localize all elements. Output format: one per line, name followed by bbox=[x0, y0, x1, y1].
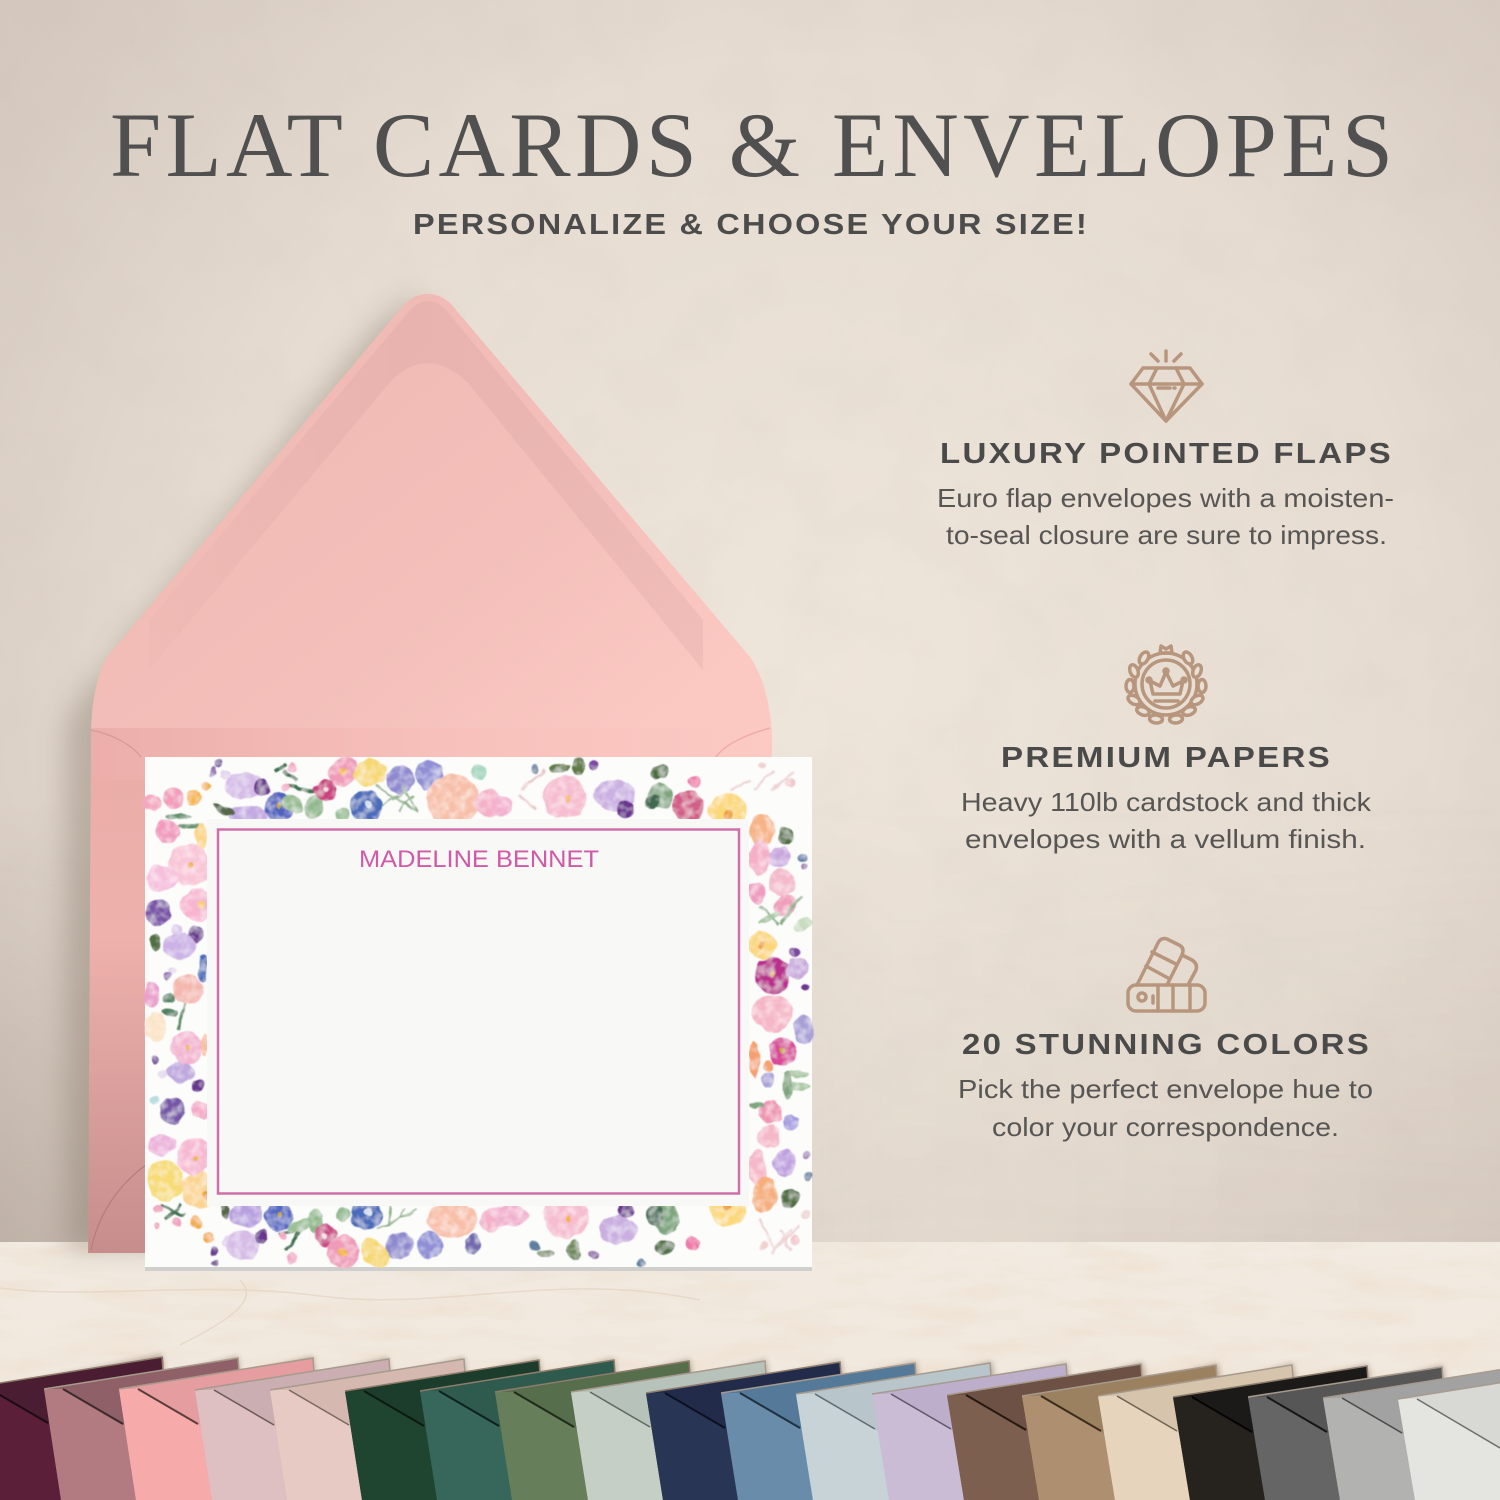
icon: diamond bbox=[1131, 351, 1202, 421]
name: MADELINE BENNET bbox=[359, 846, 599, 873]
description: Pick the perfect envelope hue to bbox=[958, 1074, 1373, 1104]
feature: premium papers: envelopes with a vellum finish. bbox=[965, 824, 1366, 854]
icon: crown badge bbox=[1126, 646, 1206, 724]
card base bbox=[145, 757, 812, 1271]
heading: LUXURY POINTED FLAPS bbox=[940, 438, 1393, 470]
swatch shadow bbox=[0, 1354, 1500, 1500]
feature: luxury pointed flaps: to-seal closure are sure to impress. bbox=[946, 520, 1387, 550]
description: Heavy 110lb cardstock and thick bbox=[961, 787, 1372, 817]
feature: premium papers bbox=[961, 742, 1372, 854]
feature: 20 stunning colors: color your correspondence. bbox=[992, 1112, 1339, 1142]
subtitle: PERSONALIZE & CHOOSE YOUR SIZE! bbox=[413, 209, 1089, 241]
envelope body bbox=[88, 730, 146, 1253]
feature: 20 stunning colors bbox=[958, 1029, 1373, 1142]
floral border bbox=[143, 757, 815, 1274]
bottom right flowers bbox=[480, 1188, 800, 1266]
heading: PREMIUM PAPERS bbox=[1001, 742, 1332, 774]
envelope shadow on wall bbox=[66, 300, 560, 1250]
inner white panel bbox=[207, 819, 749, 1206]
icon: colour swatch fan bbox=[1128, 938, 1205, 1011]
pink frame bbox=[218, 830, 739, 1194]
card bbox=[143, 757, 815, 1274]
title: FLAT CARDS & ENVELOPES bbox=[110, 94, 1393, 196]
right column flowers bbox=[747, 814, 815, 1250]
top left flowers bbox=[202, 757, 502, 826]
envelope liner band bbox=[149, 301, 703, 670]
top right flowers bbox=[492, 757, 795, 831]
left column flowers bbox=[143, 788, 213, 1174]
envelope flap bbox=[91, 294, 772, 760]
heading: 20 STUNNING COLORS bbox=[962, 1029, 1371, 1061]
feature: luxury pointed flaps bbox=[937, 438, 1394, 550]
description: Euro flap envelopes with a moisten- bbox=[937, 483, 1394, 513]
envelope colour swatches bbox=[0, 1354, 1500, 1500]
bottom left flowers bbox=[147, 1159, 497, 1274]
marble floor bbox=[0, 1242, 1500, 1500]
envelope bbox=[66, 294, 772, 1253]
